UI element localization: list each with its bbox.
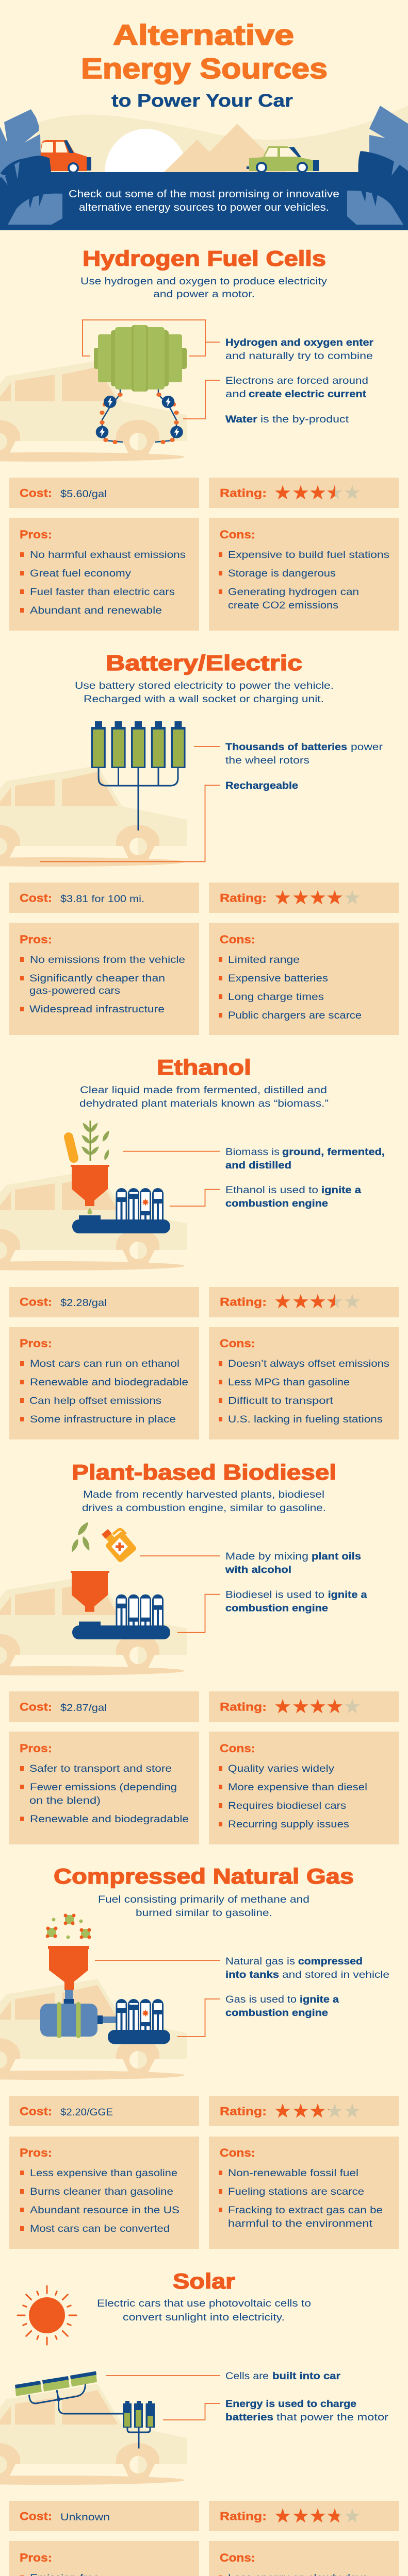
callouts: into tanks bbox=[225, 1969, 279, 1980]
pros panel: Abundant and renewable bbox=[30, 605, 162, 616]
description: Recharged with a wall socket or charging unit. bbox=[84, 693, 324, 705]
callouts: Cells are bbox=[225, 2370, 269, 2382]
icon: gas molecules bbox=[45, 1913, 91, 1939]
callouts: that power the motor bbox=[276, 2412, 389, 2423]
pros panel: Can help offset emissions bbox=[29, 1395, 161, 1406]
cons panel: U.S. lacking in fueling stations bbox=[228, 1414, 383, 1425]
ethanol diagram bbox=[69, 1121, 220, 1233]
heading: Ethanol bbox=[157, 1055, 251, 1079]
section: solar bbox=[0, 2269, 399, 2576]
car silhouette bbox=[0, 766, 187, 867]
icon: funnel bbox=[48, 1946, 89, 1990]
cons panel: Fueling stations are scarce bbox=[228, 2186, 364, 2197]
callouts: Biodiesel is used to bbox=[225, 1589, 324, 1600]
cons panel: Fracking to extract gas can be bbox=[228, 2205, 383, 2216]
pros panel: Some infrastructure in place bbox=[30, 1414, 176, 1425]
pros panel: Most cars can be converted bbox=[30, 2223, 170, 2234]
cost panel: $3.81 for 100 mi. bbox=[60, 893, 144, 905]
rating panel bbox=[209, 1287, 399, 1317]
battery pack diagram bbox=[40, 721, 220, 861]
pros panel: Pros: bbox=[20, 528, 52, 541]
pros panel: Burns cleaner than gasoline bbox=[30, 2186, 173, 2197]
callouts: ground, fermented, bbox=[282, 1146, 385, 1158]
rating panel: Rating: bbox=[220, 891, 267, 905]
description bbox=[75, 680, 334, 705]
callouts: compressed bbox=[298, 1956, 363, 1967]
cons panel: Public chargers are scarce bbox=[228, 1010, 362, 1021]
callouts: batteries bbox=[225, 2412, 273, 2423]
icon: oil jug bbox=[98, 1522, 138, 1564]
icon: solar panels bbox=[15, 2371, 97, 2396]
cons panel bbox=[209, 923, 399, 1035]
cost panel: Cost: bbox=[20, 891, 52, 905]
callouts: and bbox=[225, 388, 246, 400]
description bbox=[80, 276, 327, 300]
section: ethanol bbox=[0, 1055, 399, 1439]
cons panel: Generating hydrogen can bbox=[228, 586, 359, 598]
band bbox=[0, 172, 408, 230]
icon: engine bbox=[108, 1999, 170, 2044]
heading: Compressed Natural Gas bbox=[54, 1864, 354, 1888]
description: Clear liquid made from fermented, distilled and bbox=[80, 1084, 327, 1096]
cost panel: $2.87/gal bbox=[60, 1702, 107, 1714]
callouts: the wheel rotors bbox=[225, 755, 309, 766]
cons panel bbox=[209, 1327, 399, 1439]
icon: leaves bbox=[70, 1520, 92, 1553]
cost panel bbox=[9, 2501, 199, 2531]
description: burned similar to gasoline. bbox=[136, 1907, 272, 1919]
pros panel: Widespread infrastructure bbox=[29, 1004, 165, 1015]
car silhouette bbox=[0, 2384, 187, 2485]
section: hydrogen fuel cells bbox=[0, 246, 399, 631]
icon: green car bbox=[247, 146, 319, 173]
cons panel bbox=[209, 1732, 399, 1844]
rating panel bbox=[209, 478, 399, 508]
cost panel: Cost: bbox=[20, 1700, 52, 1714]
callouts: Biomass is bbox=[225, 1146, 280, 1158]
callouts: Natural gas is bbox=[225, 1956, 295, 1967]
pros panel: Fuel faster than electric cars bbox=[30, 586, 175, 598]
cons panel: Long charge times bbox=[228, 991, 324, 1003]
callouts: plant oils bbox=[312, 1551, 361, 1562]
cons panel bbox=[209, 518, 399, 631]
callouts: with alcohol bbox=[225, 1564, 291, 1575]
cons panel: Recurring supply issues bbox=[228, 1819, 349, 1830]
rating panel: Rating: bbox=[220, 1295, 267, 1309]
icon: sun bbox=[18, 2286, 76, 2345]
car silhouette bbox=[0, 1170, 187, 1270]
left leaves bbox=[0, 109, 62, 225]
callouts: built into car bbox=[272, 2370, 340, 2382]
pros panel: on the blend) bbox=[29, 1795, 101, 1806]
rating panel bbox=[209, 1691, 399, 1722]
pros panel: No emissions from the vehicle bbox=[30, 954, 185, 965]
icon: biomass plants bbox=[69, 1121, 111, 1161]
header illustration bbox=[0, 106, 408, 230]
cons panel: Non-renewable fossil fuel bbox=[228, 2167, 358, 2179]
callouts: and distilled bbox=[225, 1160, 291, 1171]
cons panel: Cons: bbox=[220, 2551, 255, 2564]
pros panel bbox=[9, 923, 199, 1035]
callouts: Energy is used to charge bbox=[225, 2398, 356, 2410]
callouts bbox=[225, 337, 373, 425]
cons panel: Cons: bbox=[220, 1337, 255, 1350]
callouts: ignite a bbox=[300, 1994, 339, 2005]
callouts: Water bbox=[225, 414, 257, 425]
intro text: alternative energy sources to power our vehicles. bbox=[79, 202, 329, 213]
heading: Solar bbox=[173, 2269, 235, 2293]
pros panel bbox=[9, 2541, 199, 2576]
cons panel: Cons: bbox=[220, 1742, 255, 1755]
cost panel: $2.20/GGE bbox=[60, 2107, 113, 2118]
cost panel: Unknown bbox=[60, 2512, 110, 2523]
callouts: Thousands of batteries bbox=[225, 741, 347, 753]
callouts: ignite a bbox=[321, 1184, 361, 1196]
description bbox=[79, 1084, 329, 1109]
cost panel bbox=[9, 883, 199, 913]
description: Electric cars that use photovoltaic cells to bbox=[97, 2298, 311, 2309]
callouts bbox=[225, 1956, 389, 2019]
icon: fuel drop bbox=[88, 1208, 92, 1214]
description: Use hydrogen and oxygen to produce electricity bbox=[80, 276, 327, 287]
heading: Battery/Electric bbox=[106, 651, 302, 675]
icon: engine bbox=[72, 1188, 170, 1233]
rating panel bbox=[209, 883, 399, 913]
section: plant-based biodiesel bbox=[0, 1460, 399, 1844]
icon: batteries bbox=[123, 2401, 155, 2428]
callouts: Rechargeable bbox=[225, 780, 298, 791]
description: Fuel consisting primarily of methane and bbox=[98, 1894, 309, 1905]
description: and power a motor. bbox=[153, 289, 255, 300]
pros panel: Pros: bbox=[20, 933, 52, 946]
icon: red car bbox=[40, 140, 91, 174]
intro text: Check out some of the most promising or innovative bbox=[69, 189, 339, 200]
description bbox=[97, 2298, 311, 2323]
heading: Plant-based Biodiesel bbox=[72, 1460, 336, 1484]
pros panel bbox=[9, 518, 199, 631]
callouts bbox=[225, 1551, 367, 1614]
pros panel: Most cars can run on ethanol bbox=[30, 1358, 179, 1369]
callouts: Ethanol is used to bbox=[225, 1184, 318, 1196]
cons panel bbox=[209, 2541, 399, 2576]
car silhouette bbox=[0, 361, 187, 462]
cost panel bbox=[9, 1691, 199, 1722]
heading: Hydrogen Fuel Cells bbox=[83, 246, 326, 270]
description: Made from recently harvested plants, biodiesel bbox=[83, 1489, 324, 1500]
section: compressed natural gas bbox=[0, 1864, 399, 2249]
car silhouette bbox=[0, 1574, 187, 1675]
cons panel: Expensive to build fuel stations bbox=[228, 549, 389, 561]
callouts: Gas is used to bbox=[225, 1994, 297, 2005]
solar diagram bbox=[15, 2371, 220, 2448]
callouts: combustion engine bbox=[225, 1198, 328, 1209]
icon: funnel bbox=[71, 1571, 109, 1612]
cons panel: Quality varies widely bbox=[228, 1763, 334, 1774]
callouts: Electrons are forced around bbox=[225, 375, 368, 386]
title: to Power Your Car bbox=[111, 91, 293, 111]
rating panel bbox=[209, 2501, 399, 2531]
fuel cell diagram bbox=[83, 320, 220, 444]
cons panel bbox=[209, 2137, 399, 2249]
callouts: is the by-product bbox=[260, 414, 349, 425]
section: battery electric bbox=[0, 651, 399, 1035]
cons panel: Expensive batteries bbox=[228, 973, 328, 984]
pros panel bbox=[9, 1327, 199, 1439]
title bbox=[81, 19, 328, 111]
cons panel: Storage is dangerous bbox=[228, 568, 336, 579]
callouts bbox=[225, 1146, 385, 1209]
callouts bbox=[225, 2370, 389, 2423]
cost panel bbox=[9, 478, 199, 508]
cost panel bbox=[9, 2096, 199, 2126]
pros panel: Pros: bbox=[20, 2146, 52, 2159]
pros panel: Great fuel economy bbox=[30, 568, 131, 579]
description: drives a combustion engine, similar to gasoline. bbox=[82, 1502, 326, 1514]
callouts: Hydrogen and oxygen enter bbox=[225, 337, 373, 348]
cons panel: Doesn’t always offset emissions bbox=[228, 1358, 389, 1369]
pros panel: Renewable and biodegradable bbox=[30, 1814, 189, 1825]
callouts: create electric current bbox=[249, 388, 367, 400]
description: Use battery stored electricity to power the vehicle. bbox=[75, 680, 334, 691]
biodiesel diagram bbox=[70, 1520, 220, 1639]
pros panel: Fewer emissions (depending bbox=[30, 1782, 177, 1793]
callouts: power bbox=[351, 741, 383, 753]
description: convert sunlight into electricity. bbox=[123, 2312, 285, 2323]
rating panel: Rating: bbox=[220, 2510, 267, 2522]
rating panel: Rating: bbox=[220, 2105, 267, 2117]
callouts: Made by mixing bbox=[225, 1551, 308, 1562]
cons panel: Limited range bbox=[228, 954, 300, 965]
callouts: combustion engine bbox=[225, 2007, 328, 2019]
callouts: combustion engine bbox=[225, 1602, 328, 1614]
pros panel: Renewable and biodegradable bbox=[30, 1377, 188, 1388]
cons panel: harmful to the environment bbox=[228, 2218, 373, 2229]
cons panel: Cons: bbox=[220, 528, 255, 541]
pros panel: gas-powered cars bbox=[29, 985, 120, 996]
rating panel: Rating: bbox=[220, 486, 267, 500]
pros panel: Safer to transport and store bbox=[29, 1763, 172, 1774]
cost panel: Cost: bbox=[20, 2510, 52, 2522]
pros panel: Abundant resource in the US bbox=[30, 2205, 179, 2216]
cons panel: create CO2 emissions bbox=[228, 600, 338, 611]
title: Alternative bbox=[113, 19, 294, 51]
rating panel bbox=[209, 2096, 399, 2126]
cost panel: $5.60/gal bbox=[60, 488, 107, 500]
cons panel: Requires biodiesel cars bbox=[228, 1800, 346, 1811]
cost panel bbox=[9, 1287, 199, 1317]
cons panel: Cons: bbox=[220, 933, 255, 946]
description bbox=[82, 1489, 326, 1514]
intro text bbox=[69, 189, 339, 213]
icon: funnel bbox=[71, 1165, 109, 1206]
description bbox=[98, 1894, 309, 1919]
icon: engine bbox=[72, 1595, 170, 1639]
cons panel: Difficult to transport bbox=[228, 1395, 334, 1406]
pros panel: Pros: bbox=[20, 2551, 52, 2564]
cost panel: Cost: bbox=[20, 486, 52, 500]
title: Energy Sources bbox=[81, 52, 328, 84]
right leaves bbox=[347, 106, 408, 225]
natural gas diagram bbox=[40, 1913, 220, 2044]
car silhouette bbox=[0, 1979, 187, 2080]
pros panel: Significantly cheaper than bbox=[29, 973, 165, 984]
pros panel bbox=[9, 2137, 199, 2249]
pros panel: Pros: bbox=[20, 1337, 52, 1350]
pros panel: Less expensive than gasoline bbox=[30, 2167, 177, 2179]
rating panel: Rating: bbox=[220, 1700, 267, 1714]
cost panel: Cost: bbox=[20, 2105, 52, 2117]
callouts: and stored in vehicle bbox=[282, 1969, 389, 1980]
cost panel: Cost: bbox=[20, 1295, 52, 1309]
cons panel: Cons: bbox=[220, 2146, 255, 2159]
cost panel: $2.28/gal bbox=[60, 1297, 107, 1309]
pros panel: No harmful exhaust emissions bbox=[30, 549, 186, 561]
callouts: ignite a bbox=[328, 1589, 367, 1600]
pros panel bbox=[9, 1732, 199, 1844]
cons panel: More expensive than diesel bbox=[228, 1782, 367, 1793]
pros panel: Pros: bbox=[20, 1742, 52, 1755]
callouts: and naturally try to combine bbox=[225, 350, 373, 362]
cons panel: Less MPG than gasoline bbox=[228, 1377, 350, 1388]
callouts bbox=[225, 741, 383, 791]
icon: gas tank bbox=[40, 1990, 116, 2038]
description: dehydrated plant materials known as “biomass.” bbox=[79, 1098, 329, 1109]
